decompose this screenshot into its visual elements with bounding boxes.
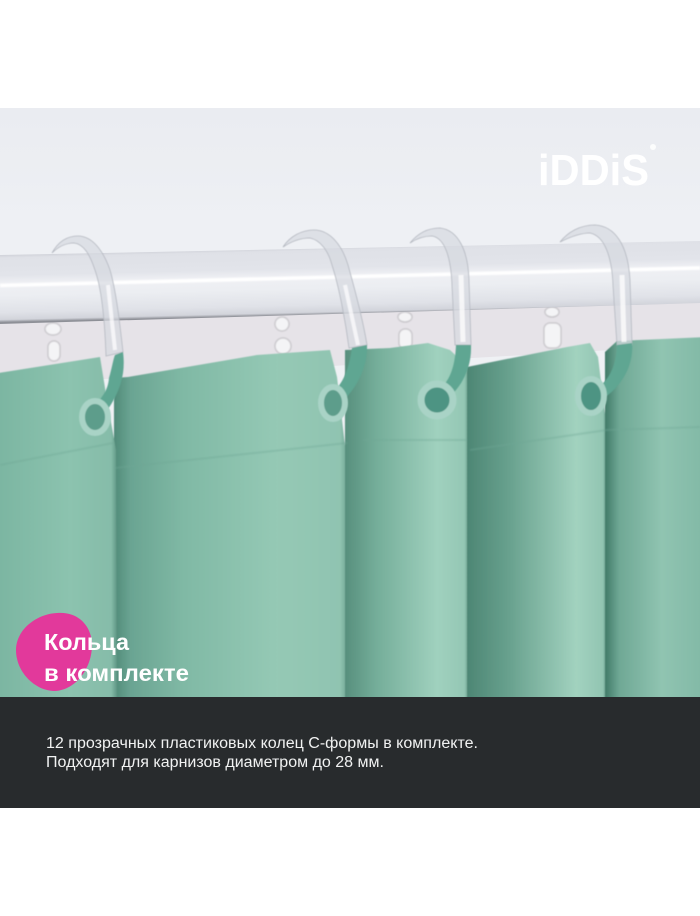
- ring 3: [410, 228, 471, 416]
- logo registered mark: [650, 144, 656, 150]
- description text: Подходят для карнизов диаметром до 28 мм.: [46, 754, 384, 771]
- hooks behind rod: [45, 307, 561, 361]
- fold 2: [114, 350, 347, 705]
- panel: description band: [0, 697, 700, 808]
- panel: product photo: [0, 108, 700, 705]
- fold 3: [345, 343, 468, 705]
- description text: [46, 735, 478, 771]
- hem stitching: [0, 427, 700, 468]
- heading: в комплекте: [44, 660, 189, 686]
- curtain folds: [0, 337, 700, 705]
- wall background: [0, 108, 700, 697]
- ring 2: [283, 230, 367, 419]
- rod highlight: [0, 268, 700, 286]
- wall shade below rod: [0, 300, 700, 385]
- ring 4: [560, 225, 632, 413]
- ring 1: [52, 236, 124, 433]
- fold 4: [467, 343, 607, 705]
- fold 1: [0, 357, 117, 705]
- rings: [52, 225, 632, 433]
- curtain rod: [0, 241, 700, 324]
- description text: 12 прозрачных пластиковых колец С-формы в комплекте.: [46, 735, 478, 752]
- logo: IDDIS: iDDiS: [538, 146, 649, 195]
- fold 5: [605, 337, 700, 705]
- heading: Кольца: [44, 629, 129, 655]
- heading: [44, 629, 189, 686]
- pink blob: [16, 613, 92, 691]
